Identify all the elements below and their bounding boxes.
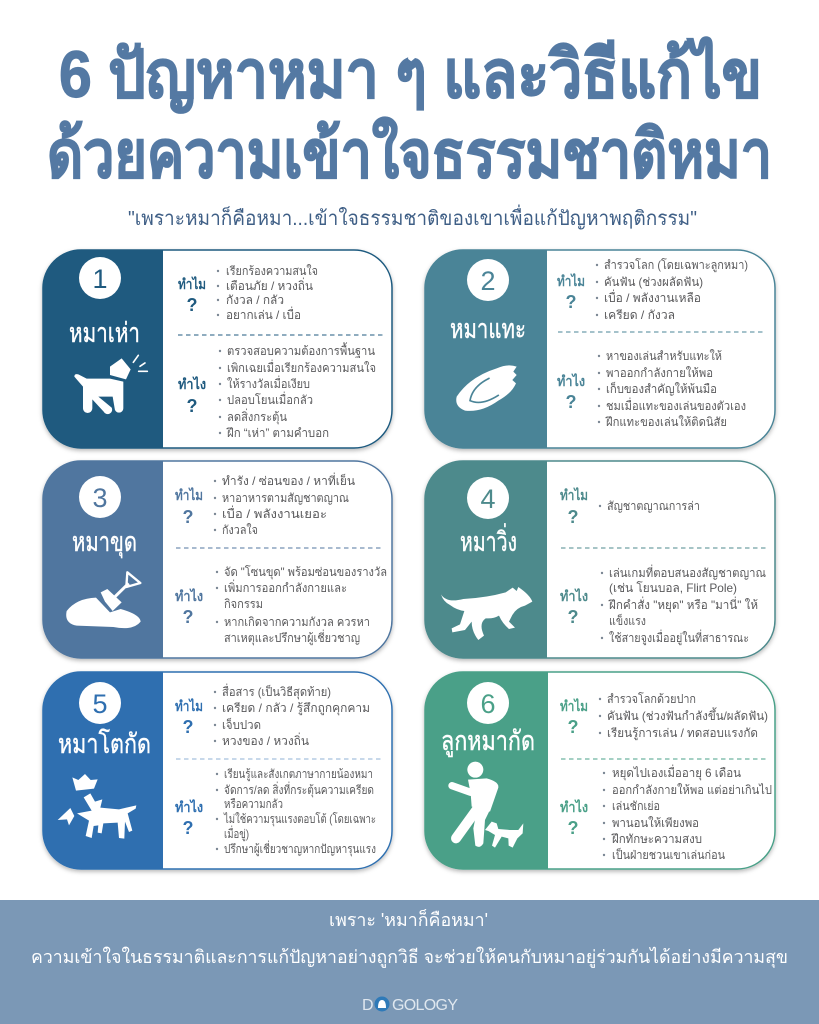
card background	[425, 250, 775, 448]
side panel	[43, 461, 163, 658]
footer text: เพราะ 'หมาก็คือหมา'	[329, 908, 488, 930]
panel: card 3 digging	[43, 461, 392, 658]
icon: shovel in soil	[66, 572, 141, 628]
side panel	[43, 672, 163, 869]
how list: ปรึกษาผู้เชี่ยวชาญหากปัญหารุนแรง	[224, 840, 376, 857]
why label: ทำไม	[175, 486, 203, 503]
why list: เจ็บปวด	[222, 717, 261, 732]
how label	[560, 798, 588, 838]
how list: หากเกิดจากความกังวล ควรหา	[224, 615, 370, 629]
why list: กังวล / กลัว	[226, 293, 284, 307]
why list: สำรวจโลก (โดยเฉพาะลูกหมา)	[604, 258, 748, 273]
how label: ทำไง	[557, 372, 585, 389]
how list: เมื่อขู่)	[224, 825, 249, 842]
how list: เพิ่มการออกกำลังกายและ	[224, 579, 347, 595]
how list: ฝึก “เห่า” ตามคำบอก	[226, 426, 329, 440]
subtitle: "เพราะหมาก็คือหมา...เข้าใจธรรมชาติของเขาเพื่อแก้ปัญหาพฤติกรรม"	[128, 204, 697, 230]
how list: เรียนรู้และสังเกตภาษากายน้องหมา	[224, 767, 373, 782]
number badge	[79, 476, 121, 518]
how list: (เช่น โยนบอล, Flirt Pole)	[609, 581, 737, 595]
how label	[560, 587, 588, 627]
icon: running dog	[441, 587, 532, 640]
why label: ทำไม	[560, 697, 588, 714]
why label	[175, 486, 203, 527]
number badge	[467, 259, 509, 301]
how list: ให้รางวัลเมื่อเงียบ	[227, 375, 310, 391]
why list	[214, 472, 355, 537]
heading: chewing dog: หมาแทะ	[450, 314, 526, 344]
number badge: 3	[92, 483, 108, 513]
how list: เป็นฝ่ายชวนเขาเล่นก่อน	[612, 847, 725, 862]
panel: card 6 puppy biting	[425, 672, 775, 869]
why label: ?	[182, 507, 194, 527]
how list: ฝึกแทะของเล่นให้ติดนิสัย	[605, 415, 727, 429]
how list: ไม่ใช้ความรุนแรงตอบโต้ (โดยเฉพาะ	[223, 812, 376, 827]
how list: เล่นชักเย่อ	[612, 799, 660, 813]
how list: จัด "โซนขุด" พร้อมซ่อนของรางวัล	[224, 565, 387, 580]
how list: ฝึกคำสั่ง "หยุด" หรือ "มานี่" ให้	[608, 596, 758, 613]
why label: ทำไม	[175, 697, 203, 714]
how label: ?	[182, 818, 194, 838]
why list	[214, 683, 370, 748]
side panel	[425, 672, 548, 869]
icon: barking dog	[74, 355, 147, 414]
heading: barking dog: หมาเห่า	[69, 318, 140, 348]
side panel	[425, 461, 547, 658]
number badge	[467, 682, 509, 724]
why list	[217, 264, 318, 322]
how label: ?	[568, 818, 578, 838]
why label: ?	[566, 292, 576, 312]
why label: ทำไม	[178, 275, 206, 292]
number badge: 5	[92, 689, 108, 719]
number badge	[79, 257, 121, 299]
footer text	[31, 908, 788, 968]
how label	[178, 375, 206, 416]
why label: ?	[568, 507, 578, 527]
logo: GOLOGY	[392, 997, 458, 1014]
how list: ใช้สายจูงเมื่ออยู่ในที่สาธารณะ	[609, 629, 749, 646]
heading: digging dog: หมาขุด	[72, 527, 137, 559]
why list: ทำรัง / ซ่อนของ / หาที่เย็น	[222, 472, 355, 488]
how list	[216, 565, 387, 646]
how label: ?	[566, 392, 576, 412]
how list: เล่นเกมที่ตอบสนองสัญชาตญาณ	[609, 564, 766, 580]
why list: เรียนรู้การเล่น / ทดสอบแรงกัด	[607, 726, 758, 741]
card background	[425, 672, 775, 869]
number badge	[79, 682, 121, 724]
how label: ทำไง	[560, 798, 588, 815]
how list: พาออกกำลังกายให้พอ	[606, 366, 713, 380]
logo: D	[362, 997, 374, 1014]
how list: ลดสิ่งกระตุ้น	[227, 408, 287, 425]
panel: card 2 chewing	[425, 250, 775, 448]
how label: ทำไง	[175, 587, 203, 604]
footer text: ความเข้าใจในธรรมาติและการแก้ปัญหาอย่างถูกวิธี จะช่วยให้คนกับหมาอยู่ร่วมกันได้อย่างมีความสุข	[31, 946, 788, 968]
how list: หรือความกลัว	[224, 797, 283, 811]
why list: หวงของ / หวงถิ่น	[222, 732, 309, 748]
number badge: 2	[480, 266, 496, 296]
icon: dog biting fragments	[58, 774, 136, 839]
how list: เพิกเฉยเมื่อเรียกร้องความสนใจ	[227, 359, 376, 375]
card background	[43, 250, 392, 448]
how list: ปลอบโยนเมื่อกลัว	[227, 391, 313, 407]
number badge: 4	[480, 484, 496, 514]
heading: running dog: หมาวิ่ง	[460, 523, 517, 557]
how label: ?	[182, 607, 194, 627]
why list: เครียด / กลัว / รู้สึกถูกคุกคาม	[222, 701, 370, 716]
heading: adult dog biting: หมาโตกัด	[58, 729, 151, 759]
why list: เตือนภัย / หวงถิ่น	[226, 277, 313, 293]
side panel	[425, 250, 547, 448]
why label: ทำไม	[560, 486, 588, 503]
how list	[601, 564, 766, 646]
how label: ?	[568, 607, 578, 627]
how list	[216, 767, 376, 857]
how label: ทำไง	[178, 375, 206, 392]
how list: เก็บของสำคัญให้พ้นมือ	[606, 381, 717, 396]
why list: สำรวจโลกด้วยปาก	[607, 692, 696, 706]
how label: ทำไง	[175, 798, 203, 815]
footer band	[0, 900, 819, 1024]
card background	[425, 461, 775, 658]
how list: สาเหตุและปรึกษาผู้เชี่ยวชาญ	[224, 629, 360, 646]
number badge: 6	[480, 689, 496, 719]
why list	[596, 258, 748, 322]
why list: เครียด / กังวล	[604, 308, 675, 322]
why list: อยากเล่น / เบื่อ	[226, 306, 301, 322]
icon: chewed toy	[456, 365, 517, 411]
card background	[43, 672, 392, 869]
why list	[599, 692, 768, 741]
how list: หาของเล่นสำหรับแทะให้	[606, 349, 722, 363]
why label	[175, 697, 203, 737]
number badge	[467, 477, 509, 519]
why label: ?	[182, 717, 194, 737]
why list: สื่อสาร (เป็นวิธีสุดท้าย)	[222, 683, 331, 700]
how label: ?	[186, 396, 198, 416]
panel: card 1 barking	[43, 250, 392, 448]
logo	[362, 996, 458, 1014]
why label: ?	[568, 717, 578, 737]
how list: แข็งแรง	[609, 613, 646, 628]
how label: ทำไง	[560, 587, 588, 604]
why list: คันฟัน (ช่วงฟันกำลังขึ้น/ผลัดฟัน)	[607, 707, 768, 723]
side panel	[43, 250, 163, 448]
how list	[598, 349, 746, 429]
how label	[175, 587, 203, 627]
how label	[557, 372, 585, 412]
icon: person and puppy	[452, 762, 523, 848]
how list: ฝึกทักษะความสงบ	[611, 832, 702, 846]
number badge: 1	[92, 264, 108, 294]
how list	[219, 342, 376, 440]
how list: จัดการ/ลด สิ่งที่กระตุ้นความเครียด	[224, 781, 374, 798]
why label	[178, 275, 206, 315]
title	[47, 36, 772, 191]
how list: กิจกรรม	[224, 597, 263, 611]
panel: card 4 running	[425, 461, 775, 658]
why label	[560, 486, 588, 527]
why list: เบื่อ / พลังงานเหลือ	[604, 289, 701, 305]
how list: พานอนให้เพียงพอ	[612, 816, 699, 830]
panel: card 5 aggressive biting	[43, 672, 392, 869]
how label	[175, 798, 203, 838]
why list: กังวลใจ	[222, 523, 258, 537]
heading: puppy biting: ลูกหมากัด	[441, 726, 535, 757]
why list: หาอาหารตามสัญชาตญาณ	[222, 491, 349, 505]
how list: ตรวจสอบความต้องการพื้นฐาน	[227, 342, 375, 358]
why list: เบื่อ / พลังงานเยอะ	[222, 505, 327, 521]
why label: ทำไม	[557, 272, 585, 289]
how list: ออกกำลังกายให้พอ แต่อย่าเกินไป	[612, 783, 772, 797]
why list: สัญชาตญาณการล่า	[607, 499, 700, 513]
why label	[560, 697, 588, 737]
how list	[603, 764, 772, 862]
how list: หยุดไปเองเมื่ออายุ 6 เดือน	[612, 764, 741, 781]
why label: ?	[186, 295, 198, 315]
why list: คันฟัน (ช่วงผลัดฟัน)	[604, 275, 703, 289]
card background	[43, 461, 392, 658]
why label	[557, 272, 585, 312]
why list: เรียกร้องความสนใจ	[226, 264, 318, 278]
how list: ชมเมื่อแทะของเล่นของตัวเอง	[606, 397, 746, 413]
